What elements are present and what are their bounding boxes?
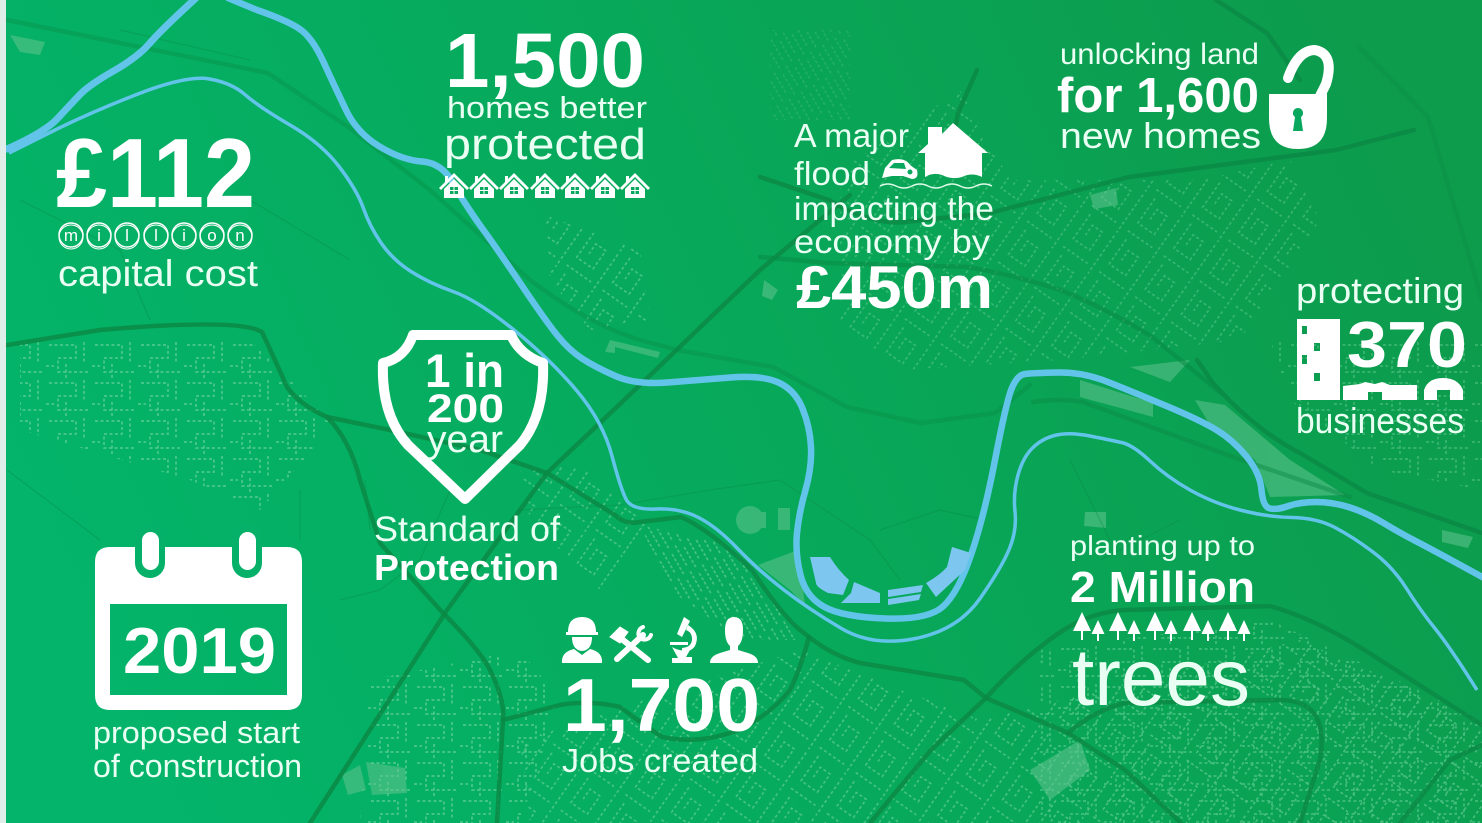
stat: jobs created xyxy=(562,617,760,779)
number: 370 xyxy=(1347,308,1467,381)
stat: standard of protection: Protection xyxy=(374,547,559,588)
river: lakes xyxy=(810,547,971,605)
stat: unlocking land: new homes xyxy=(1060,115,1261,156)
million in circles: i xyxy=(182,226,186,245)
stat: unlocking land xyxy=(1057,38,1329,156)
million in circles: n xyxy=(235,226,245,245)
icon: business buildings xyxy=(1297,319,1463,400)
shield text: 1 in xyxy=(425,344,504,397)
stat: businesses xyxy=(1296,270,1467,441)
stat: major flood: £450m xyxy=(796,254,993,321)
label: capital cost xyxy=(58,253,259,294)
stat: major flood: impacting the xyxy=(794,190,994,227)
left edge strip xyxy=(0,0,6,823)
icon: flooded house xyxy=(918,123,988,178)
map: minor roads xyxy=(7,30,1180,600)
icon: open padlock xyxy=(1269,50,1329,149)
icon: tools xyxy=(610,627,651,660)
million in circles: m xyxy=(64,226,78,245)
number: 1,500 xyxy=(445,18,645,104)
stat: unlocking land: for 1,600 xyxy=(1057,69,1259,123)
text: unlocking land xyxy=(1060,38,1259,71)
stat: trees xyxy=(1070,530,1255,723)
icon: row of houses xyxy=(439,173,650,198)
million in circles: o xyxy=(207,226,217,245)
label bottom: businesses xyxy=(1296,400,1464,441)
million in circles xyxy=(59,223,252,249)
amount: £112 xyxy=(56,118,255,228)
icon: business person xyxy=(710,617,758,663)
icon: water waves xyxy=(880,184,992,188)
stat: major flood: economy by xyxy=(794,223,991,260)
label top: protecting xyxy=(1296,270,1464,311)
million in circles: i xyxy=(97,226,101,245)
label top: planting up to xyxy=(1070,530,1255,561)
label: Jobs created xyxy=(562,742,758,779)
river: main channel xyxy=(7,0,1482,619)
million in circles: l xyxy=(154,226,158,245)
stat: homes protected: protected xyxy=(444,120,646,169)
million in circles: l xyxy=(125,226,129,245)
river: thin channel xyxy=(9,78,1477,690)
icon: row of trees xyxy=(1073,612,1250,641)
stat: major flood: flood xyxy=(794,155,870,192)
stat: homes protected xyxy=(439,18,650,198)
stat: standard of protection xyxy=(374,335,560,588)
stat: start of construction xyxy=(93,525,302,784)
icon: shield xyxy=(383,335,543,499)
calendar year: 2019 xyxy=(123,614,276,687)
stat: trees: 2 Million xyxy=(1070,563,1255,612)
text: A major xyxy=(794,117,909,154)
label: proposed start xyxy=(93,715,300,750)
label: homes better xyxy=(447,90,647,125)
stat: standard of protection: 200 xyxy=(427,387,504,431)
number: 1,700 xyxy=(563,663,760,747)
stat: start of construction: of construction xyxy=(93,748,302,784)
icon: flooded car xyxy=(882,159,917,179)
icon: calendar xyxy=(95,525,302,710)
stat: major flood xyxy=(794,117,994,321)
label: Standard of xyxy=(374,510,560,549)
icon: microscope xyxy=(670,617,697,663)
stat: capital cost xyxy=(56,118,259,294)
icon: construction worker xyxy=(562,617,602,663)
label big: trees xyxy=(1072,633,1250,723)
stat: standard of protection: year xyxy=(427,419,503,461)
